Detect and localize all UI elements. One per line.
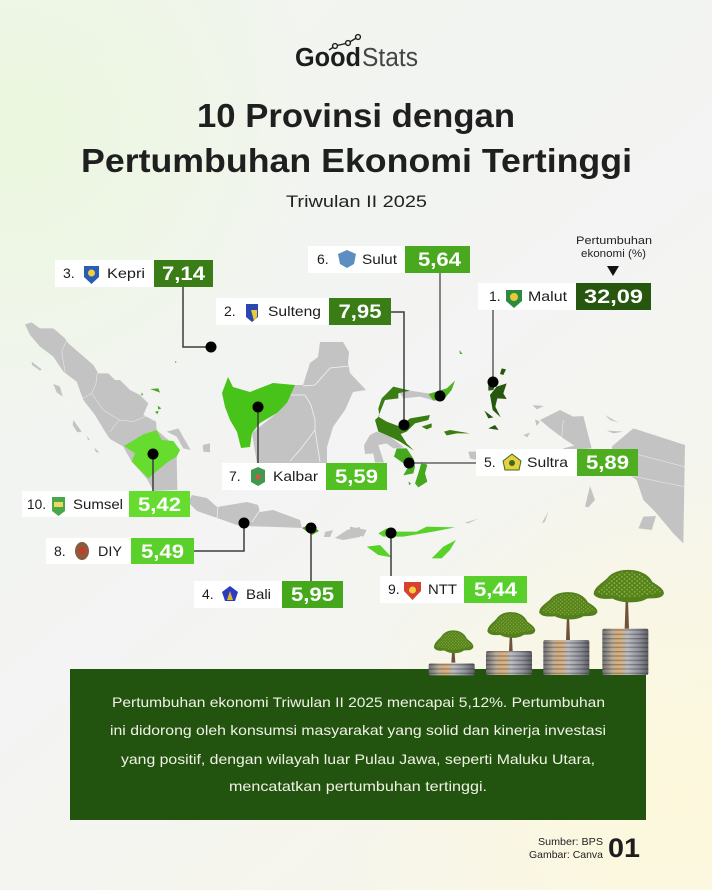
title: Pertumbuhan Ekonomi Tertinggi	[81, 142, 632, 179]
label: 3 Kepri: 7,14	[162, 263, 205, 285]
label: 4 Bali: 4.	[202, 586, 214, 602]
title	[81, 97, 632, 179]
label: 4 Bali: 5,95	[291, 584, 334, 606]
coin stack 4 with tree	[594, 570, 664, 675]
title: 10 Provinsi dengan	[197, 97, 515, 134]
label: 4 Bali: Bali	[246, 586, 271, 602]
label: 3 Kepri	[55, 260, 213, 287]
text panel	[70, 669, 646, 820]
label: 8 DIY	[46, 538, 194, 564]
panel body text	[110, 694, 606, 794]
illustration: coin stacks with growing trees	[429, 570, 664, 675]
label: 9 NTT: 5,44	[474, 579, 517, 601]
label: 10 Sumsel: Sumsel	[73, 496, 123, 512]
label: 9 NTT	[380, 576, 527, 603]
label: 8 DIY: DIY	[98, 543, 123, 559]
legend note: Pertumbuhan ekonomi (%): ekonomi (%)	[581, 248, 646, 260]
label: 10 Sumsel: 10.	[27, 496, 46, 512]
label: 6 Sulut: Sulut	[362, 251, 397, 267]
label: 1 Malut: Malut	[528, 288, 567, 304]
label: 3 Kepri: 3.	[63, 265, 75, 281]
coin stack 2 with tree	[486, 612, 535, 675]
label: 8 DIY: 5,49	[141, 541, 184, 563]
panel body text: yang positif, dengan wilayah luar Pulau Jawa, seperti Maluku Utara,	[121, 751, 595, 767]
label: 2 Sulteng: Sulteng	[268, 303, 321, 319]
coin stack 1 with tree	[429, 630, 475, 675]
label: 2 Sulteng: 2.	[224, 303, 236, 319]
label: 9 NTT: 9.	[388, 581, 400, 597]
label: 1 Malut	[478, 283, 651, 310]
label: 5 Sultra: 5.	[484, 454, 496, 470]
leader lines and dots	[148, 273, 498, 581]
label: 4 Bali	[194, 581, 343, 608]
label: 2 Sulteng	[216, 298, 391, 325]
Kalimantan, Java, Bali	[188, 342, 366, 540]
source credits	[529, 837, 603, 861]
logo: GoodStats: Stats	[362, 44, 418, 72]
panel body text: ini didorong oleh konsumsi masyarakat yang solid dan kinerja investasi	[110, 722, 606, 738]
source credits: Sumber: BPS	[538, 837, 603, 848]
coin stack 3 with tree	[539, 592, 597, 675]
source credits: Gambar: Canva	[529, 850, 603, 861]
label: 2 Sulteng: 7,95	[338, 301, 382, 323]
map of Indonesia	[25, 322, 685, 558]
Sumatra	[25, 322, 210, 491]
label: 1 Malut: 32,09	[584, 286, 643, 308]
label: 7 Kalbar: 7.	[229, 468, 241, 484]
label: 7 Kalbar: 5,59	[335, 466, 378, 488]
label: 7 Kalbar	[222, 463, 387, 490]
page number: 01	[608, 833, 640, 863]
label: 5 Sultra	[476, 449, 638, 476]
panel body text: Pertumbuhan ekonomi Triwulan II 2025 mencapai 5,12%. Pertumbuhan	[112, 694, 605, 710]
label: 6 Sulut	[308, 246, 470, 273]
label: 6 Sulut: 5,64	[418, 249, 461, 271]
label: 3 Kepri: Kepri	[107, 265, 145, 281]
legend note: Pertumbuhan ekonomi (%)	[576, 235, 652, 276]
subtitle: Triwulan II 2025	[286, 192, 427, 211]
logo: GoodStats: Good	[295, 44, 361, 72]
label: 10 Sumsel	[22, 491, 190, 517]
Sulawesi and Maluku Utara west	[364, 350, 470, 487]
label: 6 Sulut: 6.	[317, 251, 329, 267]
label: 5 Sultra: Sultra	[527, 454, 568, 470]
label: 7 Kalbar: Kalbar	[273, 468, 318, 484]
legend note: Pertumbuhan ekonomi (%): Pertumbuhan	[576, 235, 652, 247]
label: 8 DIY: 8.	[54, 543, 66, 559]
label: 1 Malut: 1.	[489, 288, 501, 304]
panel body text: mencatatkan pertumbuhan tertinggi.	[229, 778, 487, 794]
logo: GoodStats	[295, 35, 418, 72]
label: 10 Sumsel: 5,42	[138, 494, 181, 516]
label: 5 Sultra: 5,89	[586, 452, 629, 474]
label: 9 NTT: NTT	[428, 581, 457, 597]
Maluku, Nusa Tenggara, Papua	[350, 368, 685, 558]
